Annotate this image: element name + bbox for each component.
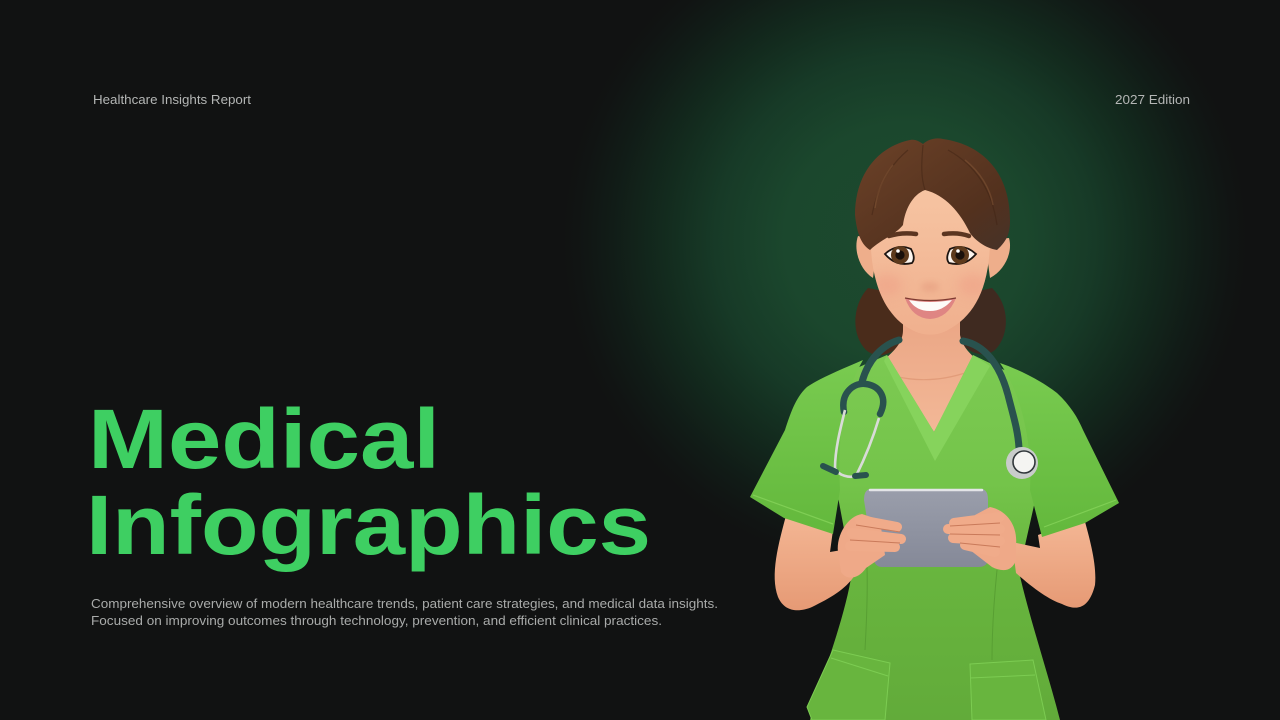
right hand: [948, 507, 1016, 570]
ears: [856, 236, 1010, 278]
stethoscope: [823, 340, 1038, 479]
title: Medical: [88, 392, 440, 486]
hair ponytails: [855, 288, 1006, 355]
collar: [884, 355, 990, 461]
pockets: [807, 650, 1046, 720]
left hand: [838, 514, 901, 578]
header: edition: 2027 Edition: [1115, 92, 1190, 107]
title: Infographics: [86, 478, 651, 572]
tablet: [864, 489, 988, 567]
neck and chest: [886, 310, 975, 432]
right sleeve: [1000, 363, 1119, 537]
face: [871, 190, 990, 331]
scrub top body: [810, 355, 1060, 720]
eyes: [885, 246, 976, 264]
illustration: nurse: [750, 138, 1119, 720]
title: [86, 392, 651, 572]
left sleeve: [750, 360, 863, 534]
hair front: [855, 138, 1010, 250]
arms: [775, 512, 1095, 610]
header: report name: Healthcare Insights Report: [93, 92, 251, 107]
smile: [905, 298, 956, 319]
description text: [91, 596, 718, 628]
description text: Focused on improving outcomes through technology, prevention, and efficient clinical practices.: [91, 613, 662, 628]
eyebrows: [889, 233, 969, 236]
description text: Comprehensive overview of modern healthcare trends, patient care strategies, and medical data insights.: [91, 596, 718, 611]
